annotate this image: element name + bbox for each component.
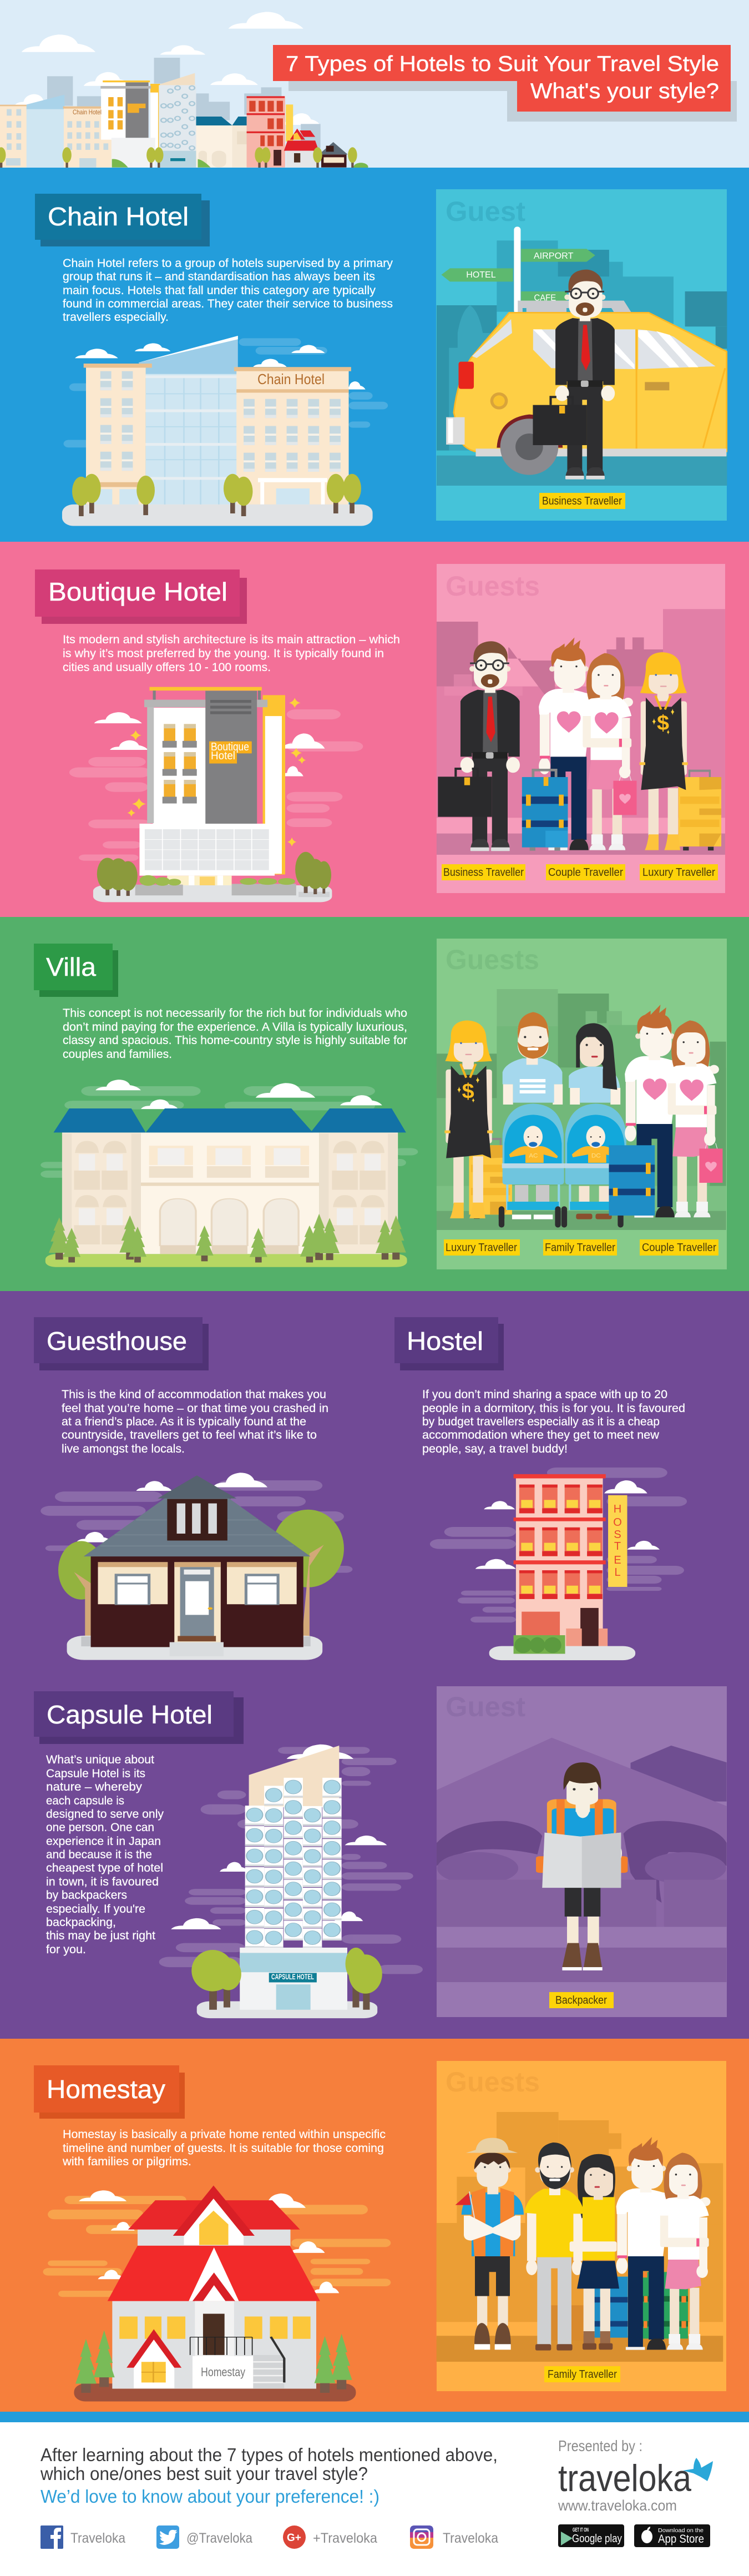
guests heading: Guests xyxy=(446,944,539,975)
illustration: capsule hotel building: CAPSULE HOTEL xyxy=(271,1972,314,1981)
illustration: villa building xyxy=(41,1080,418,1267)
heading: boutique hotel: Boutique Hotel xyxy=(48,577,227,606)
badge: app store xyxy=(634,2524,710,2547)
text: capsule hotel description: What’s unique about xyxy=(46,1753,154,1766)
text: capsule hotel description: by backpackers xyxy=(46,1888,127,1902)
social: google plus: G+ xyxy=(287,2532,301,2544)
label: business traveller xyxy=(442,864,525,880)
illustration: guests group with strollers: AC xyxy=(529,1152,538,1159)
illustration: business traveller with taxi and signpost xyxy=(437,226,727,486)
footer band xyxy=(0,2412,749,2422)
heading: hostel: Hostel xyxy=(407,1327,483,1355)
illustration: boutique hotel building xyxy=(69,687,363,902)
text: capsule hotel description: Capsule Hotel is its xyxy=(46,1767,145,1780)
presented by label: Presented by : xyxy=(558,2437,642,2454)
heading: villa: Villa xyxy=(46,952,96,981)
text: capsule hotel description: this may be just right xyxy=(46,1929,155,1942)
illustration: homestay building: Homestay xyxy=(201,2365,245,2379)
text: chain hotel description: Chain Hotel refers to a group of hotels supervised by a primary xyxy=(63,256,393,270)
illustration: family traveller group xyxy=(437,2112,723,2362)
heading: chain hotel xyxy=(35,194,210,246)
text: homestay description: timeline and number of guests. It is suitable for those coming xyxy=(63,2141,384,2155)
label: family traveller xyxy=(543,1239,617,1256)
panel: capsule hotel guest xyxy=(437,1686,727,2017)
social: facebook xyxy=(41,2525,125,2549)
guest heading: Guest xyxy=(446,196,525,227)
label: business traveller: Business Traveller xyxy=(542,495,622,507)
section: homestay xyxy=(0,2039,749,2412)
text: capsule hotel description: cheapest type of hotel xyxy=(46,1861,163,1874)
text: capsule hotel description: in town, it is favoured xyxy=(46,1875,159,1888)
text: capsule hotel description: each capsule is xyxy=(46,1794,124,1807)
text: chain hotel description: group that runs it – and standardisation has always been its xyxy=(63,270,375,283)
illustration: hostel building: E xyxy=(614,1554,621,1566)
label: backpacker xyxy=(549,1992,614,2008)
closing question text: We’d love to know about your preference! :) xyxy=(41,2486,379,2507)
text: guesthouse description: feel that you’re home – or that time you crashed in xyxy=(62,1402,328,1415)
illustration: skyline of hotels: Chain Hotel xyxy=(73,108,102,116)
illustration: hostel building xyxy=(430,1468,687,1660)
label: luxury traveller: Luxury Traveller xyxy=(446,1242,517,1254)
illustration: guests group with strollers: DC xyxy=(591,1152,601,1159)
heading: homestay: Homestay xyxy=(47,2075,165,2104)
illustration: business traveller with taxi and signpost: CAFE xyxy=(534,294,556,303)
text: villa description: This concept is not necessarily for the rich but for individuals who xyxy=(63,1006,407,1020)
label: family traveller: Family Traveller xyxy=(548,2368,617,2381)
panel: homestay guests xyxy=(437,2061,726,2391)
illustration: hostel building: T xyxy=(614,1540,621,1552)
text: chain hotel description: main focus. Hotels that fall under this category are typically xyxy=(63,284,376,297)
text: capsule hotel description: backpacking, xyxy=(46,1915,116,1929)
heading: guesthouse xyxy=(34,1317,209,1370)
social: google plus xyxy=(283,2525,377,2549)
text: capsule hotel description: designed to serve only xyxy=(46,1807,164,1821)
illustration: capsule hotel building xyxy=(159,1745,423,2018)
badge: app store: App Store xyxy=(658,2533,704,2545)
section: boutique hotel xyxy=(0,542,749,917)
badge: app store: Download on the xyxy=(658,2528,704,2534)
text: chain hotel description: travellers especially. xyxy=(63,310,169,324)
text: boutique description xyxy=(63,633,400,674)
text: guesthouse description xyxy=(62,1388,328,1455)
heading: hostel xyxy=(394,1317,504,1370)
label: couple traveller: Couple Traveller xyxy=(548,866,623,879)
illustration: chain hotel building xyxy=(62,336,388,526)
badge: google play: GET IT ON xyxy=(573,2527,589,2533)
text: guesthouse description: live amongst the locals. xyxy=(62,1442,185,1455)
heading: boutique hotel xyxy=(35,569,247,624)
illustration: backpacker with mountains xyxy=(437,1738,727,1982)
header background xyxy=(0,0,749,168)
illustration: hostel building: O xyxy=(613,1516,622,1529)
social: instagram: Traveloka xyxy=(443,2530,498,2546)
text: capsule hotel description xyxy=(46,1753,164,1956)
title banner xyxy=(273,45,737,122)
illustration: hostel building: H xyxy=(614,1503,621,1515)
guests heading: Guests xyxy=(446,571,540,602)
heading: villa xyxy=(34,944,118,997)
text: villa description: couples and families. xyxy=(63,1047,172,1061)
label: family traveller: Family Traveller xyxy=(545,1242,615,1254)
illustration: hostel building: S xyxy=(614,1529,621,1541)
social: twitter xyxy=(156,2525,252,2549)
illustration: business traveller with taxi and signpost: AIRPORT xyxy=(534,251,574,261)
text: homestay description: Homestay is basically a private home rented within unspecific xyxy=(63,2128,386,2141)
guest heading: Guest xyxy=(446,1691,525,1722)
text: hostel description xyxy=(422,1388,685,1455)
heading: chain hotel: Chain Hotel xyxy=(48,202,189,231)
heading: capsule hotel xyxy=(34,1691,244,1744)
illustration: boutique hotel building: Boutique xyxy=(211,741,249,753)
label: backpacker: Backpacker xyxy=(555,1994,607,2007)
closing question text: which one/ones best suit your travel style? xyxy=(40,2463,368,2484)
social: facebook: Traveloka xyxy=(70,2530,125,2546)
label: luxury traveller: Luxury Traveller xyxy=(642,866,715,879)
illustration: homestay building xyxy=(43,2186,391,2401)
father xyxy=(503,1012,563,1219)
panel: boutique guests xyxy=(437,564,725,893)
label: couple traveller: Couple Traveller xyxy=(642,1242,716,1254)
text: chain hotel description xyxy=(63,256,393,324)
section: villa xyxy=(0,917,749,1291)
label: family traveller xyxy=(544,2366,620,2382)
text: capsule hotel description: one person. One can xyxy=(46,1821,154,1834)
footer background xyxy=(0,2422,749,2576)
section: chain hotel xyxy=(0,168,749,542)
text: boutique description: cities and usually offers 10 - 100 rooms. xyxy=(63,661,271,674)
text: hostel description: accommodation where they get to meet new xyxy=(422,1428,659,1441)
label: business traveller: Business Traveller xyxy=(443,866,524,879)
illustration: boutique hotel building: Hotel xyxy=(211,750,235,762)
text: hostel description: If you don’t mind sharing a space with up to 20 xyxy=(422,1388,667,1401)
illustration: guests group xyxy=(437,609,725,855)
title banner: 7 Types of Hotels to Suit Your Travel Style xyxy=(286,52,719,76)
text: guesthouse description: at a friend’s place. As it is typically found at the xyxy=(62,1415,306,1428)
social: google plus: +Traveloka xyxy=(313,2530,377,2546)
text: guesthouse description: countryside, travellers get to feel what it’s like to xyxy=(62,1428,317,1441)
text: capsule hotel description: especially. If you're xyxy=(46,1902,145,1915)
logo: traveloka: traveloka xyxy=(558,2457,691,2499)
text: chain hotel description: found in commercial areas. They cater their service to business xyxy=(63,297,393,310)
text: capsule hotel description: experience it in Japan xyxy=(46,1834,161,1848)
illustration: business traveller with taxi and signpost: HOTEL xyxy=(466,270,496,280)
closing question text xyxy=(40,2444,498,2507)
panel: villa guests xyxy=(437,939,727,1269)
text: homestay description: with families or pilgrims. xyxy=(62,2155,191,2168)
label: business traveller xyxy=(539,493,625,509)
illustration: chain hotel building: Chain Hotel xyxy=(257,371,325,387)
text: capsule hotel description: for you. xyxy=(46,1943,86,1956)
text: villa description: don’t mind paying for the experience. A Villa is typically luxurious, xyxy=(63,1020,407,1034)
illustration: skyline of hotels xyxy=(0,12,368,171)
text: boutique description: Its modern and stylish architecture is its main attraction – which xyxy=(63,633,400,646)
guests heading: Guests xyxy=(446,2066,540,2098)
mother xyxy=(569,1023,620,1219)
text: boutique description: is why it’s most preferred by the young. It is typically found in xyxy=(63,647,384,660)
text: hostel description: by budget travellers especially as it is a cheap xyxy=(422,1415,660,1428)
panel: chain hotel guest xyxy=(436,189,727,521)
text: capsule hotel description: nature – whereby xyxy=(46,1780,142,1793)
illustration: guesthouse building xyxy=(41,1473,352,1660)
text: hostel description: people in a dormitory, this is for you. It is favoured xyxy=(422,1402,685,1415)
website url: www.traveloka.com xyxy=(558,2497,677,2514)
heading: capsule hotel: Capsule Hotel xyxy=(47,1700,212,1729)
illustration: hostel building: L xyxy=(614,1566,621,1579)
illustration: guests group with strollers xyxy=(437,989,726,1230)
heading: guesthouse: Guesthouse xyxy=(47,1327,187,1355)
title banner: What's your style? xyxy=(530,79,719,103)
text: homestay description xyxy=(62,2128,386,2168)
text: villa description xyxy=(63,1006,407,1061)
closing question text: After learning about the 7 types of hotels mentioned above, xyxy=(41,2444,498,2465)
text: capsule hotel description: and because it is the xyxy=(46,1848,152,1861)
heading: homestay xyxy=(34,2065,185,2119)
badge: google play xyxy=(558,2524,624,2547)
text: guesthouse description: This is the kind of accommodation that makes you xyxy=(62,1388,326,1401)
text: villa description: classy and spacious. This home-country style is highly suitable for xyxy=(63,1034,407,1047)
text: hostel description: people, say, a travel buddy! xyxy=(422,1442,568,1455)
social: twitter: @Traveloka xyxy=(186,2530,252,2546)
section: guesthouse, hostel and capsule hotel xyxy=(0,1291,749,2039)
badge: google play: Google play xyxy=(572,2533,622,2545)
social: instagram xyxy=(410,2525,498,2549)
